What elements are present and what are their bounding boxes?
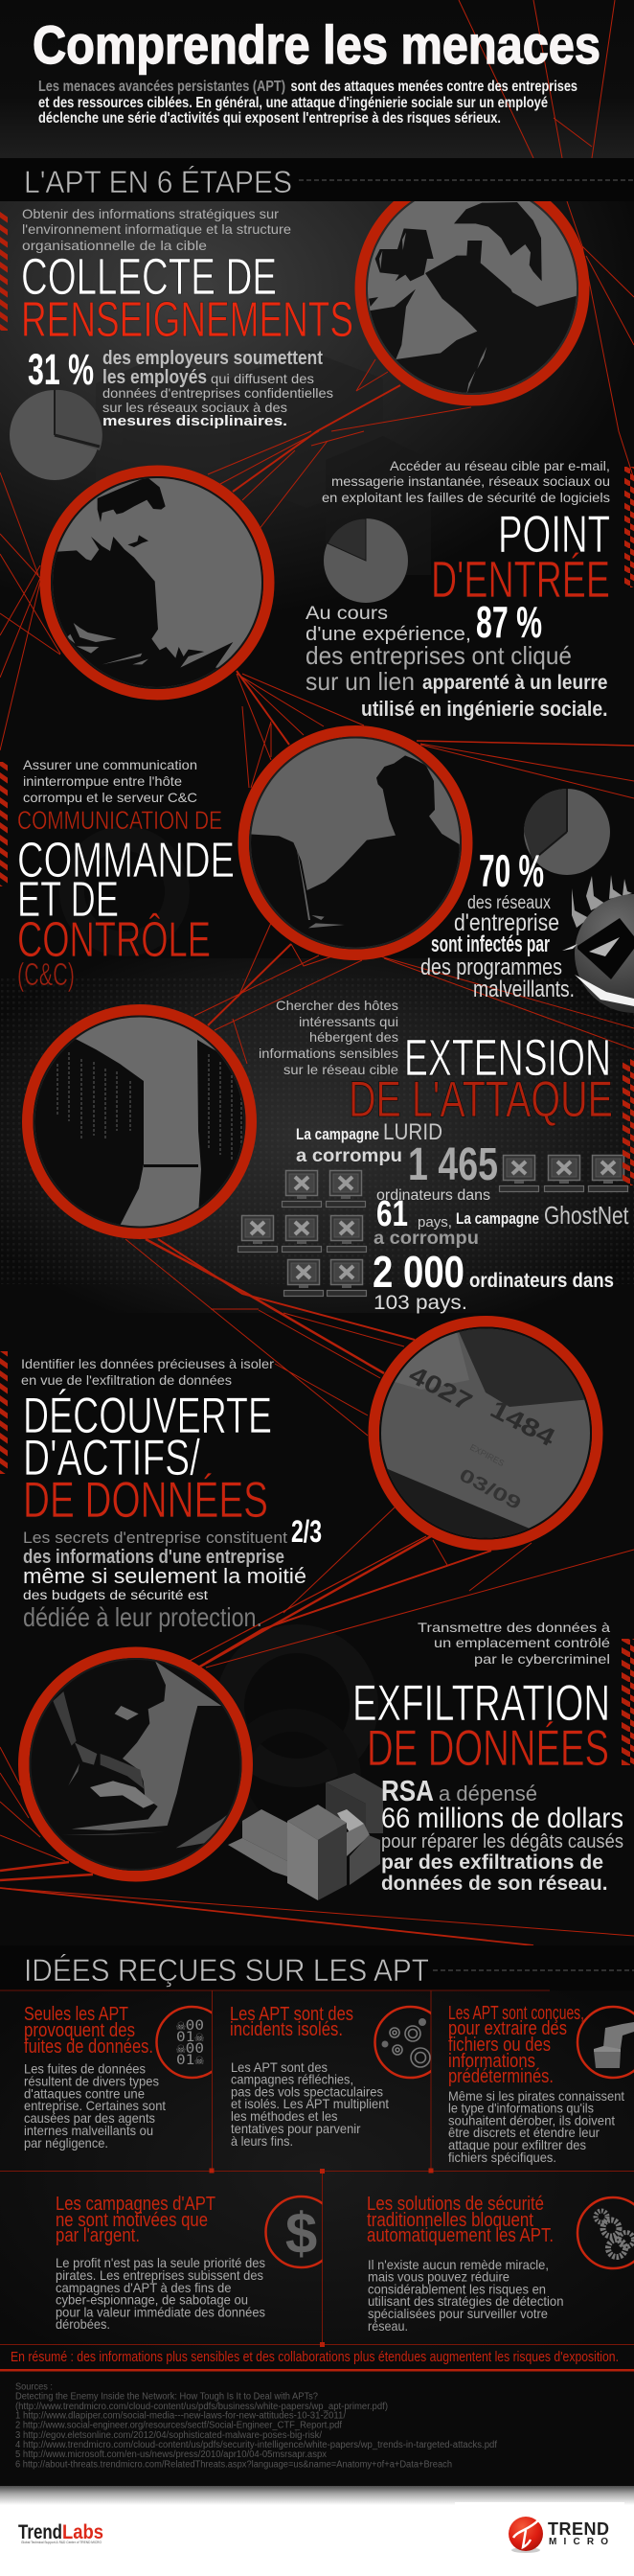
myth heading: fuites de données. — [24, 2036, 153, 2058]
statistic 31 %: des employeurs soumettent — [102, 348, 323, 369]
heading: L'APT EN 6 ÉTAPES — [24, 165, 292, 199]
pie chart 1 — [10, 390, 102, 480]
icon: binary skulls: 01☠ — [176, 2053, 205, 2068]
statistic 2/3: des budgets de sécurité est — [23, 1588, 208, 1602]
logo: Trend Micro: TREND — [548, 2519, 609, 2539]
myth body: Les APT sont des — [231, 2059, 328, 2075]
icon: data boxes — [228, 1773, 383, 1900]
myth body: les méthodes et les — [231, 2108, 337, 2124]
description: corrompu et le serveur C&C — [23, 790, 197, 805]
description: en vue de l'exfiltration de données — [21, 1372, 232, 1388]
myth body: Même si les pirates connaissent — [448, 2088, 624, 2104]
description: intéressants qui — [299, 1014, 398, 1029]
statistics: LURID and GhostNet campaigns: La campagne — [456, 1209, 539, 1228]
band: section heading L'APT en 6 etapes — [0, 158, 634, 201]
myth body: à leurs fins. — [231, 2133, 293, 2149]
description: informations sensibles — [259, 1046, 398, 1061]
red network lines — [0, 0, 634, 1945]
description: Chercher des hôtes — [276, 998, 398, 1013]
statistic 87 % — [306, 597, 607, 721]
step title: DÉCOUVERTE — [23, 1388, 272, 1444]
statistics: LURID and GhostNet campaigns — [296, 1119, 629, 1314]
icon: folder and files — [577, 2007, 634, 2078]
myth grid lines — [0, 1990, 634, 2347]
description: sur le réseau cible — [283, 1062, 398, 1077]
header — [33, 14, 600, 126]
statistic 70 %: d'entreprise — [454, 909, 559, 936]
myth heading — [367, 2194, 554, 2246]
myth heading: provoquent des — [24, 2020, 135, 2041]
pie chart 3 — [524, 789, 610, 875]
sources: 3 http://egov.eletsonline.com/2012/04/sophisticated-malware-poses-big-risk/ — [15, 2430, 322, 2441]
statistic 31 %: données d'entreprises confidentielles — [102, 385, 333, 401]
statistic 70 %: des réseaux — [467, 893, 551, 913]
myth body: et isolés. Les APT multiplient — [231, 2096, 389, 2111]
icon: targets — [374, 2005, 431, 2080]
step title: ET DE — [17, 872, 119, 928]
myth body: pas des vols spectaculaires — [231, 2083, 383, 2099]
myth 5 — [367, 2194, 634, 2334]
description: hébergent des — [309, 1029, 398, 1045]
statistics: LURID and GhostNet campaigns: ordinateurs dans — [469, 1270, 614, 1292]
myth heading: automatiquement les APT. — [367, 2225, 554, 2246]
logo: TrendLabs: Global Technical Support & R&D Center of TREND MICRO — [21, 2541, 102, 2544]
myth body: campagnes réfléchies, — [231, 2072, 353, 2087]
icon: binary skulls — [155, 2005, 212, 2080]
logo: Trend Micro: MICRO — [549, 2537, 608, 2547]
myth body — [56, 2255, 265, 2332]
myth 2 — [231, 2005, 431, 2146]
statistic 31 %: sur les réseaux sociaux à des — [102, 400, 287, 415]
myth 3 — [448, 2003, 634, 2165]
statistics: LURID and GhostNet campaigns: a corrompu — [374, 1229, 479, 1249]
statistic 87 %: sur un lien — [306, 667, 415, 696]
myth heading — [230, 2004, 353, 2040]
myth body: fichiers spécifiques. — [448, 2150, 556, 2165]
statistic 87 %: 87 % — [476, 597, 542, 647]
circle photo 5: credit card: 03/09 — [456, 1465, 524, 1514]
icon: binary skulls: 01☠ — [176, 2030, 205, 2045]
myth body: réseau. — [368, 2318, 408, 2334]
logo: TrendLabs — [18, 2521, 103, 2544]
circle photo 5: credit card: 4027 — [404, 1360, 477, 1416]
myth heading: traditionnelles bloquent — [367, 2210, 533, 2231]
icon: broken dollar — [264, 2195, 322, 2269]
myth body: entreprise. Certaines sont — [24, 2098, 166, 2113]
myth body: résultent de divers types — [24, 2074, 159, 2089]
myth body: Les fuites de données — [24, 2060, 146, 2076]
stripe 1 — [0, 211, 8, 331]
description: messagerie instantanée, réseaux sociaux ou — [331, 473, 610, 489]
statistic 70 %: sont infectés par — [431, 932, 550, 957]
statistic 87 %: apparenté à un leurre — [422, 672, 607, 694]
description: l'environnement informatique et la structure — [22, 221, 291, 237]
statistic 87 %: d'une expérience, — [306, 624, 471, 645]
step title: COLLECTE DE — [21, 248, 277, 306]
step title: COMMANDE — [17, 833, 235, 888]
circle photo 5: credit card: 1484 — [486, 1394, 560, 1452]
sources: 1 http://www.dlapiper.com/social-media---new-laws-for-new-attitudes-10-31-2011/ — [15, 2411, 346, 2421]
myth heading: pour extraire des — [448, 2018, 567, 2039]
myth heading: prédéterminés. — [448, 2066, 554, 2087]
myth body: attaque pour exfiltrer des — [448, 2137, 586, 2152]
statistic 31 %: qui diffusent des — [211, 371, 314, 386]
heading: IDÉES REÇUES SUR LES APT — [24, 1953, 429, 1988]
myth heading: par l'argent. — [56, 2225, 140, 2246]
icon: broken dollar: $ — [285, 2201, 317, 2266]
description: par le cybercriminel — [474, 1651, 610, 1667]
background: isometric cubes — [72, 350, 431, 1835]
icon: gears — [577, 2197, 634, 2268]
statistic RSA: données de son réseau. — [381, 1873, 607, 1895]
myth body: dérobées. — [56, 2316, 110, 2332]
description: Identifier les données précieuses à isoler — [21, 1356, 274, 1371]
description — [418, 1620, 610, 1667]
statistic 70 % — [420, 845, 575, 1002]
description: un emplacement contrôlé — [434, 1635, 610, 1650]
myth heading: Les solutions de sécurité — [367, 2194, 544, 2215]
stripe 3 — [0, 762, 8, 886]
stripe 4 — [623, 1059, 634, 1185]
statistic 31 %: les employés — [102, 367, 207, 388]
statistics: LURID and GhostNet campaigns: 2 000 — [373, 1247, 464, 1297]
statistic 2/3 — [23, 1514, 322, 1632]
myth 1 — [24, 2004, 228, 2150]
statistic RSA: a dépensé — [439, 1782, 537, 1806]
statistic 70 %: malveillants. — [473, 977, 575, 1002]
sources: 6 http://about-threats.trendmicro.com/RelatedThreats.aspx?language=us&name=Anatomy+of+a+Data+Breach — [15, 2459, 452, 2471]
description: en exploitant les failles de sécurité de logiciels — [322, 490, 610, 505]
step 3: communication de commande et de controle — [17, 757, 575, 1002]
step title: COMMUNICATION DE — [17, 806, 222, 835]
description: Transmettre des données à — [418, 1620, 610, 1635]
circle photo 6: hacker at laptop — [24, 1652, 247, 1876]
step 4: extension de l'attaque — [238, 998, 629, 1314]
statistics: LURID and GhostNet campaigns: pays, — [418, 1214, 452, 1230]
logo: TrendLabs: Trend — [18, 2521, 62, 2543]
statistic 70 %: des programmes — [420, 954, 562, 980]
circle photo 4: server room — [28, 1010, 251, 1241]
statistic 31 %: 31 % — [28, 345, 94, 394]
statistic 2/3: dédiée à leur protection. — [23, 1602, 262, 1632]
icon: malware mask — [562, 875, 634, 1013]
circle photo 5: credit card — [374, 1322, 598, 1545]
myth body: Le profit n'est pas la seule priorité des — [56, 2255, 265, 2270]
myth body: pour la valeur immédiate des données — [56, 2304, 265, 2319]
stripe 6 — [622, 1639, 634, 1765]
myth body: souhaitent dérober, ils doivent — [448, 2112, 615, 2128]
circle photo 3: man silhouette at laptop — [243, 731, 467, 954]
statistics: LURID and GhostNet campaigns: ordinateurs dans — [376, 1187, 490, 1204]
description — [259, 998, 398, 1077]
myth 4 — [56, 2194, 337, 2332]
circle photo 5: credit card: EXPIRES — [468, 1442, 506, 1468]
myth heading — [24, 2004, 153, 2058]
sources: (http://www.trendmicro.com/cloud-content/us/pdfs/business/white-papers/wp_apt-primer.pdf) — [15, 2402, 388, 2412]
statistic 87 %: utilisé en ingénierie sociale. — [361, 697, 607, 721]
stripe 2 — [624, 467, 634, 587]
statistic 2/3: 2/3 — [291, 1514, 322, 1549]
statistic 2/3: même si seulement la moitié — [23, 1564, 306, 1588]
myth heading: Seules les APT — [24, 2004, 128, 2025]
sources: 2 http://www.social-engineer.org/resources/sectf/Social-Engineer_CTF_Report.pdf — [15, 2421, 342, 2430]
step title — [17, 806, 235, 992]
logo: TrendLabs: Labs — [62, 2521, 103, 2543]
statistic RSA — [381, 1774, 623, 1895]
intro text: Les menaces avancées persistantes (APT) — [38, 79, 285, 95]
myth heading: ne sont motivées que — [56, 2210, 208, 2231]
myth heading — [56, 2194, 215, 2246]
myth body: considérablement les risques en — [368, 2281, 546, 2296]
myth body — [448, 2088, 624, 2165]
icon: binary skulls: ☠00 — [176, 2018, 204, 2034]
myth body — [231, 2059, 389, 2149]
myth body: mais vous pouvez réduire — [368, 2269, 509, 2285]
step title — [23, 1388, 272, 1529]
description: Assurer une communication — [23, 757, 197, 772]
sources: 4 http://www.trendmicro.com/cloud-content/us/pdfs/security-intelligence/white-papers/wp_trends-in-targeted-attacks.pdf — [15, 2440, 497, 2450]
circle photo 1: photographer — [360, 176, 584, 401]
step title: DE DONNÉES — [23, 1472, 268, 1529]
intro text — [38, 79, 577, 126]
myth body: cyber-espionnage, de sabotage ou — [56, 2292, 248, 2308]
statistics: LURID and GhostNet campaigns: La campagne — [296, 1125, 379, 1143]
myth heading: fichiers ou des — [448, 2035, 551, 2056]
circle photo 2: hands on keyboard — [45, 471, 269, 695]
statistics: LURID and GhostNet campaigns: 61 — [376, 1194, 408, 1234]
stripe 5 — [0, 1351, 8, 1474]
description: ininterrompue entre l'hôte — [23, 773, 182, 789]
myth body — [368, 2257, 563, 2334]
myth body: le type d'informations qu'ils — [448, 2101, 594, 2116]
intro text: déclenche une série d'activités qui exposent l'entreprise à des risques sérieux. — [38, 110, 501, 126]
step 1: collecte de renseignements — [21, 206, 353, 429]
description: organisationnelle de la cible — [22, 238, 207, 253]
myth body: internes malveillants ou — [24, 2123, 153, 2138]
sources — [15, 2382, 497, 2471]
icons: compromised computers — [238, 1156, 628, 1296]
description — [23, 757, 197, 805]
statistic 31 % — [28, 345, 333, 429]
statistics: LURID and GhostNet campaigns: 1 465 — [408, 1139, 498, 1190]
myth body: utilisant des stratégies de détection — [368, 2293, 563, 2309]
step title — [352, 1675, 610, 1777]
statistic 87 %: des entreprises ont cliqué — [306, 641, 572, 670]
sources: Sources : — [15, 2382, 53, 2392]
statistic 31 %: mesures disciplinaires. — [102, 413, 287, 429]
description — [21, 1356, 274, 1388]
sources: 5 http://www.microsoft.com/en-us/news/press/2010/apr10/04-05msrsapr.aspx — [15, 2450, 327, 2460]
step 2: point d'entree — [306, 458, 610, 721]
icon: binary skulls: ☠00 — [176, 2041, 204, 2057]
logo: Trend Micro — [509, 2517, 609, 2553]
myth body — [24, 2060, 166, 2150]
myth body: par négligence. — [24, 2135, 108, 2150]
statistic 2/3: des informations d'une entreprise — [23, 1547, 284, 1568]
step 5: decouverte d'actifs — [21, 1356, 322, 1632]
statistic 87 %: Au cours — [306, 604, 388, 624]
statistics: LURID and GhostNet campaigns: LURID — [383, 1119, 442, 1145]
footer background — [0, 2486, 634, 2576]
description: Accéder au réseau cible par e-mail, — [390, 458, 610, 473]
description — [322, 458, 610, 505]
myth heading: Les campagnes d'APT — [56, 2194, 215, 2215]
myth body: campagnes d'APT à des fins de — [56, 2280, 232, 2295]
myth body: être discrets et étendre leur — [448, 2125, 600, 2140]
myth body: d'attaques contre une — [24, 2085, 145, 2101]
statistic 70 %: 70 % — [479, 845, 544, 896]
step title: RENSEIGNEMENTS — [21, 292, 353, 348]
myth heading: informations — [448, 2051, 535, 2072]
myth heading — [448, 2003, 584, 2087]
pie chart 2 — [324, 518, 408, 603]
myth body: pirates. Les entreprises subissent des — [56, 2267, 263, 2283]
band: section heading idees recues — [0, 1945, 634, 1990]
statistics: LURID and GhostNet campaigns: 103 pays. — [374, 1292, 467, 1314]
myth body: spécialisées pour surveiller votre — [368, 2306, 548, 2321]
statistic 2/3: Les secrets d'entreprise constituent — [23, 1529, 287, 1547]
step 6: exfiltration de donnees — [352, 1620, 623, 1895]
description: Obtenir des informations stratégiques sur — [22, 206, 279, 221]
step title — [21, 248, 353, 348]
step title: D'ACTIFS/ — [23, 1430, 200, 1486]
myth body: tentatives pour parvenir — [231, 2121, 361, 2136]
step title — [349, 1029, 613, 1128]
step title: CONTRÔLE — [17, 912, 211, 968]
description — [22, 206, 291, 253]
myth heading: incidents isolés. — [230, 2019, 343, 2040]
myth heading: Les APT sont des — [230, 2004, 353, 2025]
myth body: causées par des agents — [24, 2110, 155, 2126]
step title — [431, 504, 610, 609]
myth body: Il n'existe aucun remède miracle, — [368, 2257, 549, 2272]
sources: Detecting the Enemy Inside the Network: How Tough Is It to Deal with APTs? — [15, 2392, 318, 2402]
statistic RSA: par des exfiltrations de — [381, 1852, 603, 1874]
statistics: LURID and GhostNet campaigns: a corrompu — [296, 1146, 402, 1166]
step title: (C&C) — [17, 956, 75, 992]
statistic RSA: RSA — [381, 1774, 434, 1807]
